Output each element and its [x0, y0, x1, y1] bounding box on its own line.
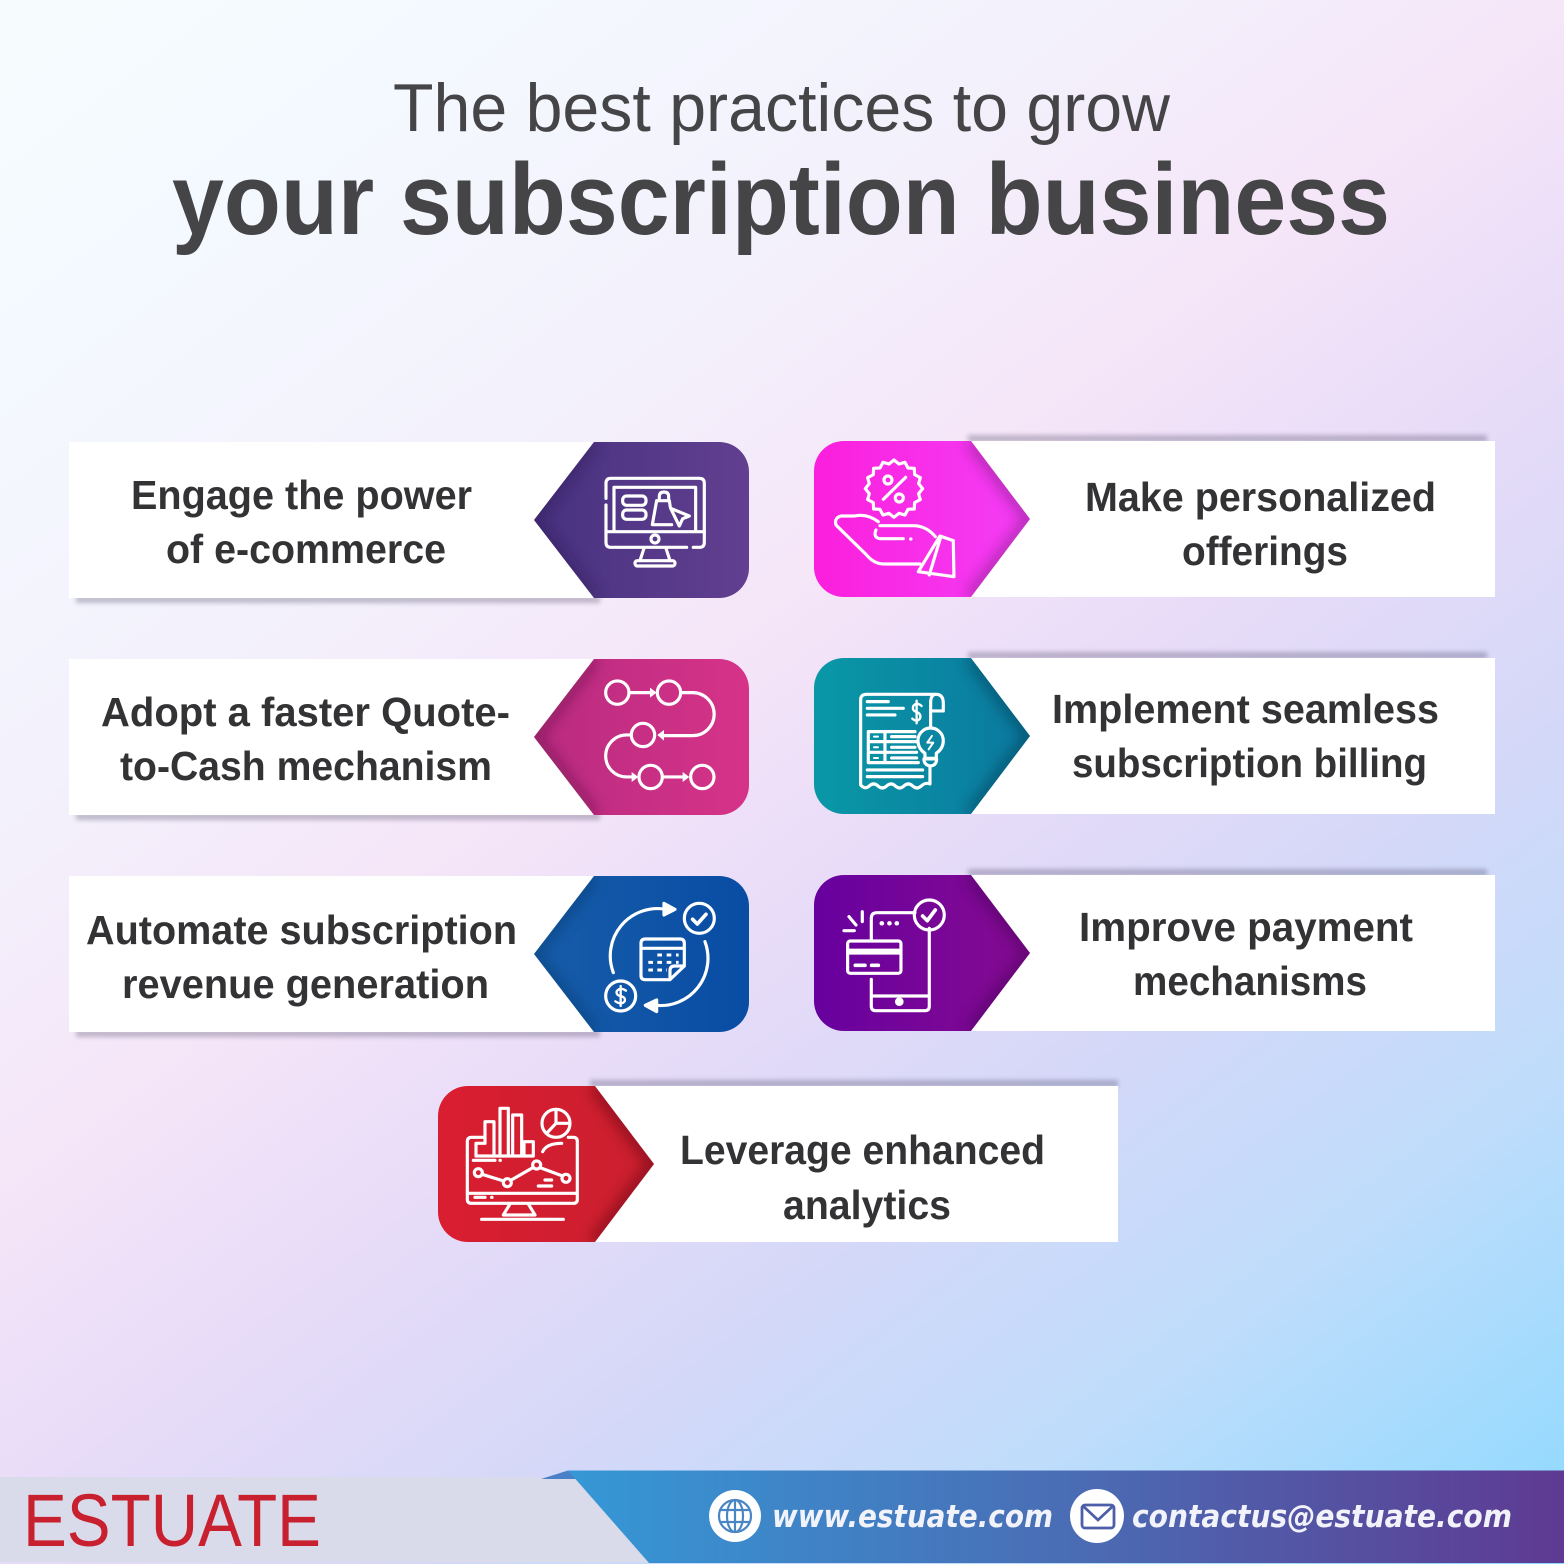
icon tab: purple	[534, 442, 749, 598]
card: Engage the power of e-commerce	[69, 442, 749, 603]
card: Adopt a faster Quote-to-Cash mechanism	[69, 659, 749, 820]
label: of e-commerce	[166, 526, 446, 572]
label: revenue generation	[122, 961, 489, 1007]
label: Improve payment	[1079, 904, 1413, 950]
icon tab: violet	[814, 875, 1030, 1031]
icon: globe	[709, 1490, 761, 1542]
card: Implement seamless subscription billing	[814, 652, 1495, 814]
footer contact band	[568, 1470, 1564, 1563]
card: Leverage enhanced analytics	[438, 1080, 1118, 1242]
label: Implement seamless	[1052, 686, 1439, 732]
icon: revenue automation cycle	[606, 903, 714, 1012]
label: Make personalized	[1085, 474, 1436, 520]
card: Automate subscription revenue generation	[69, 876, 749, 1037]
title line 2: your subscription business	[172, 144, 1390, 256]
label	[1079, 904, 1413, 1004]
icon: mail	[1070, 1489, 1124, 1543]
label	[1052, 686, 1439, 786]
icon: quote-to-cash flow	[606, 681, 714, 789]
icon tab: teal	[814, 658, 1030, 814]
label: to-Cash mechanism	[120, 743, 492, 789]
logo: ESTUATE	[23, 1479, 321, 1562]
label	[101, 689, 510, 789]
email: contactus@estuate.com	[1132, 1499, 1512, 1535]
label	[86, 907, 517, 1007]
footer flap	[541, 1470, 576, 1479]
label: mechanisms	[1133, 958, 1367, 1004]
label: offerings	[1182, 528, 1348, 574]
icon: billing receipt	[861, 694, 943, 788]
footer logo band	[0, 1477, 660, 1562]
label	[131, 472, 472, 572]
icon tab: pink	[534, 659, 749, 815]
icon: analytics monitor	[467, 1108, 577, 1219]
icon: discount in hand	[836, 460, 954, 577]
icon tab: red	[438, 1086, 654, 1242]
label: Leverage enhanced	[680, 1127, 1045, 1173]
label: Adopt a faster Quote-	[101, 689, 510, 735]
label: Engage the power	[131, 472, 472, 518]
label: subscription billing	[1072, 740, 1427, 786]
label	[1085, 474, 1436, 574]
card: Make personalized offerings	[814, 435, 1495, 597]
icon tab: magenta	[814, 441, 1030, 597]
footer	[0, 1470, 1564, 1563]
icon: phone payment	[844, 900, 944, 1011]
card: Improve payment mechanisms	[814, 869, 1495, 1031]
title line 1: The best practices to grow	[393, 70, 1171, 146]
title	[172, 70, 1390, 256]
label: Automate subscription	[86, 907, 517, 953]
label: analytics	[783, 1182, 951, 1228]
label	[680, 1127, 1045, 1228]
icon tab: blue	[534, 876, 749, 1032]
icon: e-commerce monitor	[606, 478, 704, 566]
website: www.estuate.com	[772, 1499, 1053, 1535]
